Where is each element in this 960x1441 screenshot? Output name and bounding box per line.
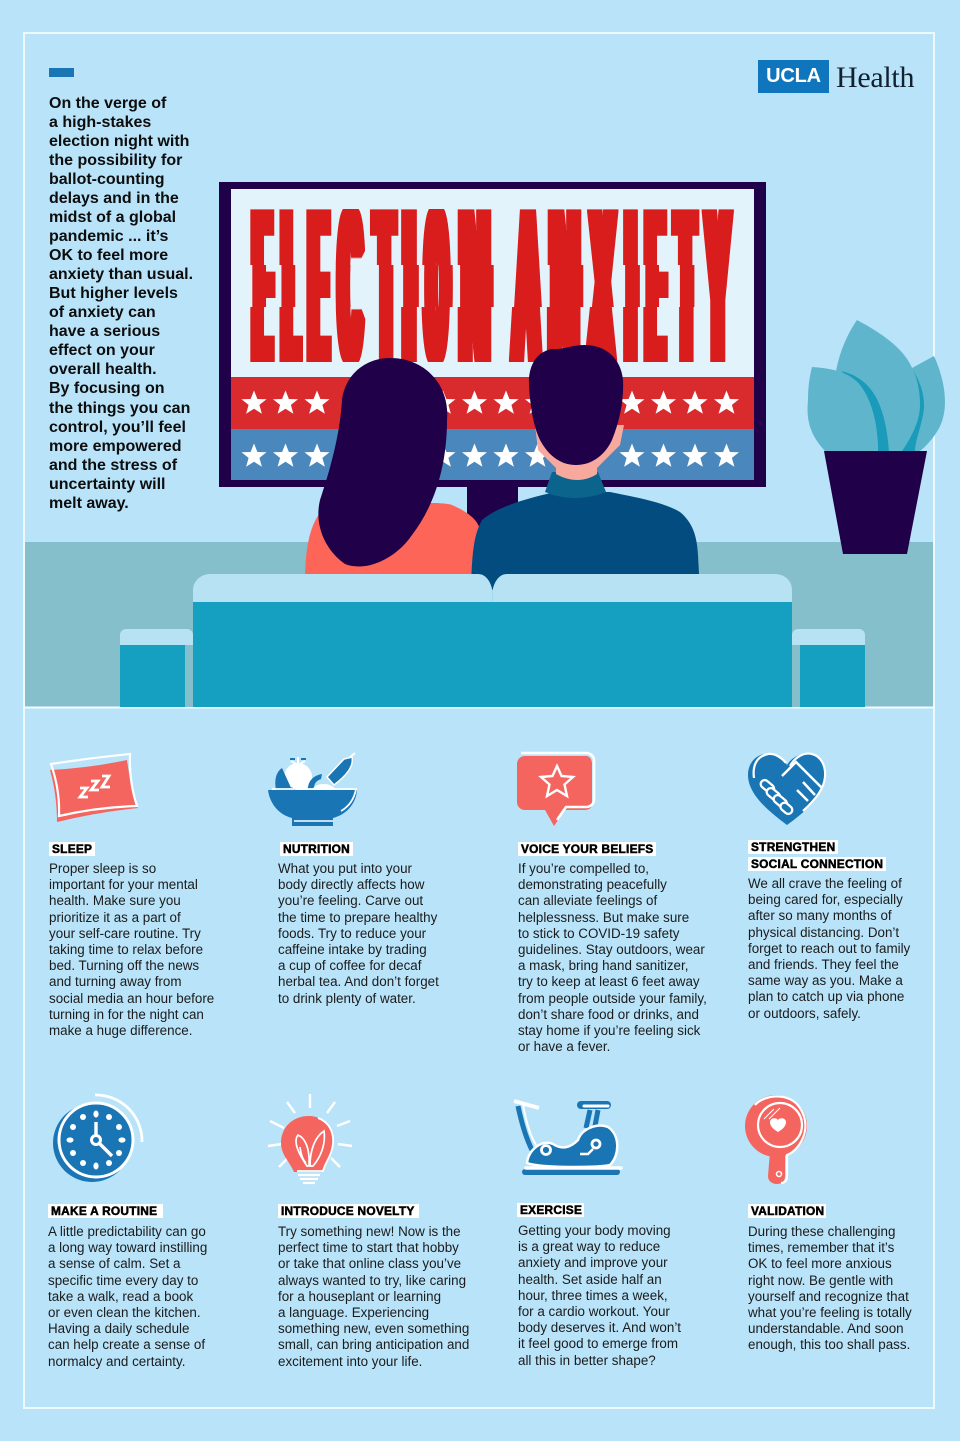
body text: or have a fever. (518, 1039, 610, 1054)
title: E (649, 164, 666, 408)
title: L (283, 164, 299, 408)
body text: to stick to COVID-19 safety (518, 926, 680, 941)
body text: you’re feeling. Carve out (278, 893, 423, 908)
body text: can help create a sense of (48, 1337, 205, 1352)
title: O (425, 164, 446, 408)
title: N (552, 164, 581, 408)
room illustration: Y (706, 164, 730, 408)
body text: turning in for the night can (49, 1007, 204, 1022)
body text: Having a daily schedule (48, 1321, 189, 1336)
body text: right now. Be gentle with (748, 1273, 893, 1288)
title: X (591, 164, 614, 408)
room illustration: Y (706, 164, 730, 408)
intro text: a high-stakes (49, 114, 151, 131)
body text (518, 1223, 681, 1368)
intro text: ballot-counting (49, 171, 165, 188)
title: C (339, 164, 362, 408)
title: E (647, 164, 664, 408)
title: I (626, 164, 635, 408)
body text: helplessness. But make sure (518, 910, 689, 925)
title: C (339, 164, 361, 408)
body text: to drink plenty of water. (278, 991, 416, 1006)
title: X (589, 164, 612, 408)
body text: important for your mental (49, 877, 198, 892)
intro text: control, you’ll feel (49, 419, 186, 436)
body text: being cared for, especially (748, 892, 903, 907)
panel: introduce novelty (268, 1094, 469, 1369)
body text: always wanted to try, like caring (278, 1273, 466, 1288)
plant (808, 320, 945, 554)
title: A (513, 164, 539, 408)
body text: We all crave the feeling of (748, 876, 902, 891)
title: T (375, 164, 394, 408)
heading: NUTRITION (283, 842, 350, 856)
body text: If you’re compelled to, (518, 861, 649, 876)
icon: pillow (50, 752, 138, 822)
body text: body deserves it. And won’t (518, 1320, 681, 1335)
body text: a mask, bring hand sanitizer, (518, 958, 688, 973)
body text: same way as you. Make a (748, 973, 903, 988)
intro text: effect on your (49, 342, 155, 359)
body text: for a houseplant or learning (278, 1289, 441, 1304)
title (250, 209, 734, 362)
body text: what you’re feeling is totally (748, 1305, 912, 1320)
body text: guidelines. Stay outdoors, wear (518, 942, 705, 957)
body text (278, 1224, 469, 1369)
television: T (678, 164, 697, 408)
body text: it feel good to emerge from (518, 1336, 678, 1351)
body text: Try something new! Now is the (278, 1224, 461, 1239)
icon: speech bubble with star (517, 752, 596, 826)
body text: demonstrating peacefully (518, 877, 667, 892)
intro text: delays and in the (49, 190, 179, 207)
intro text: midst of a global (49, 209, 176, 226)
title: N (462, 164, 491, 408)
intro text: But higher levels (49, 285, 178, 302)
panel: make a routine (48, 1094, 207, 1369)
intro text: the possibility for (49, 152, 182, 169)
intro text: and the stress of (49, 457, 177, 474)
body text (518, 861, 707, 1054)
logo: UCLA Health: UCLA (766, 65, 821, 87)
title: E (254, 164, 271, 408)
body text: a long way toward instilling (48, 1240, 207, 1255)
body text: something new, even something (278, 1321, 469, 1336)
title: N (550, 164, 579, 408)
body text (48, 1224, 207, 1369)
heading: EXERCISE (520, 1203, 582, 1217)
body text: forget to reach out to family (748, 941, 910, 956)
body text: perfect time to start that hobby (278, 1240, 459, 1255)
body text: Proper sleep is so (49, 861, 156, 876)
title: E (310, 164, 328, 408)
title: I (406, 164, 416, 408)
heading: SLEEP (52, 842, 92, 856)
intro text: By focusing on (49, 380, 165, 397)
title: C (339, 164, 361, 408)
television (219, 164, 766, 530)
body text: all this in better shape? (518, 1353, 656, 1368)
body text: is a great way to reduce (518, 1239, 660, 1254)
body text: prioritize it as a part of (49, 910, 181, 925)
title: E (254, 164, 271, 408)
body text (278, 861, 439, 1006)
intro text: pandemic ... it’s (49, 228, 168, 245)
body text: a language. Experiencing (278, 1305, 429, 1320)
title: I (628, 164, 637, 408)
body text: specific time every day to (48, 1273, 198, 1288)
logo: UCLA Health (758, 60, 914, 94)
body text: plan to catch up via phone (748, 989, 904, 1004)
panel: validation (745, 1095, 912, 1352)
title: I (626, 164, 635, 408)
television: T (677, 164, 696, 408)
heading: STRENGTHEN (751, 840, 835, 854)
intro text: anxiety than usual. (49, 266, 193, 283)
body text (748, 876, 910, 1021)
body text: small, can bring anticipation and (278, 1337, 469, 1352)
television: T (676, 164, 695, 408)
title: I (404, 164, 414, 408)
title: T (377, 164, 396, 408)
heading: MAKE A ROUTINE (51, 1204, 157, 1218)
title: T (377, 164, 396, 408)
body text: yourself and recognize that (748, 1289, 909, 1304)
icon: light bulb with leaves (268, 1094, 352, 1184)
icon: hand mirror (745, 1095, 807, 1184)
body text: can alleviate feelings of (518, 893, 657, 908)
body text: caffeine intake by trading (278, 942, 427, 957)
accent bar (49, 68, 74, 77)
icon: exercise bike (514, 1099, 623, 1175)
man (471, 345, 700, 592)
body text: stay home if you’re feeling sick (518, 1023, 700, 1038)
heading: INTRODUCE NOVELTY (281, 1204, 415, 1218)
body text: and turning away from (49, 974, 182, 989)
logo: UCLA Health: Health (836, 61, 914, 94)
title: I (404, 164, 414, 408)
body text: During these challenging (748, 1224, 895, 1239)
body text: Getting your body moving (518, 1223, 671, 1238)
heading line 2: SOCIAL CONNECTION (751, 857, 883, 871)
title: A (515, 164, 541, 408)
body text: understandable. And soon (748, 1321, 904, 1336)
body text: or outdoors, safely. (748, 1006, 861, 1021)
intro text: OK to feel more (49, 247, 168, 264)
body text: physical distancing. Don’t (748, 925, 899, 940)
title: N (549, 164, 578, 408)
heading: VALIDATION (751, 1204, 824, 1218)
body text: try to keep at least 6 feet away (518, 974, 700, 989)
intro text: overall health. (49, 361, 157, 378)
body text: a cup of coffee for decaf (278, 958, 421, 973)
panel: nutrition (268, 752, 439, 1006)
body text: after so many months of (748, 908, 892, 923)
body text: for a cardio workout. Your (518, 1304, 670, 1319)
body text (748, 1224, 912, 1352)
body text: or even clean the kitchen. (48, 1305, 201, 1320)
body text: bed. Turning off the news (49, 958, 199, 973)
intro text: more empowered (49, 438, 181, 455)
body text: health. Make sure you (49, 893, 181, 908)
sofa (120, 574, 865, 707)
body text: OK to feel more anxious (748, 1256, 892, 1271)
title: E (310, 164, 328, 408)
body text: health. Set aside half an (518, 1272, 662, 1287)
room illustration: Y (706, 164, 730, 408)
body text: from people outside your family, (518, 991, 707, 1006)
title: N (460, 164, 489, 408)
body text: What you put into your (278, 861, 412, 876)
woman (305, 358, 480, 592)
body text: taking time to relax before (49, 942, 203, 957)
intro text: election night with (49, 133, 189, 150)
body text: foods. Try to reduce your (278, 926, 426, 941)
body text: anxiety and improve your (518, 1255, 668, 1270)
body text: make a huge difference. (49, 1023, 192, 1038)
title: E (647, 164, 664, 408)
title: E (310, 164, 328, 408)
icon: handshake heart (748, 752, 826, 825)
body text: take a walk, read a book (48, 1289, 193, 1304)
body text: hour, three times a week, (518, 1288, 668, 1303)
body text: your self-care routine. Try (49, 926, 201, 941)
title: L (285, 164, 301, 408)
body text: enough, this too shall pass. (748, 1337, 910, 1352)
panel: exercise (514, 1099, 681, 1368)
intro text: uncertainty will (49, 476, 165, 493)
title: E (256, 164, 273, 408)
panel: voice your beliefs (517, 752, 707, 1054)
title: X (591, 164, 614, 408)
heading: VOICE YOUR BELIEFS (521, 842, 653, 856)
panel: sleep (49, 752, 214, 1038)
body text: or take that online class you’ve (278, 1256, 461, 1271)
title: O (428, 164, 449, 408)
body text: excitement into your life. (278, 1354, 422, 1369)
intro text (49, 95, 193, 512)
title: O (426, 164, 447, 408)
title: N (460, 164, 489, 408)
body text: herbal tea. And don’t forget (278, 974, 439, 989)
intro text: melt away. (49, 495, 129, 512)
panel: strengthen social connection (748, 752, 910, 1021)
intro text: On the verge of (49, 95, 166, 112)
intro text: the things you can (49, 400, 190, 416)
body text: don’t share food or drinks, and (518, 1007, 699, 1022)
body text: social media an hour before (49, 991, 214, 1006)
body text: the time to prepare healthy (278, 910, 437, 925)
body text: body directly affects how (278, 877, 424, 892)
body text: times, remember that it’s (748, 1240, 894, 1255)
body text: A little predictability can go (48, 1224, 206, 1239)
intro text: of anxiety can (49, 304, 156, 321)
body text: a sense of calm. Set a (48, 1256, 180, 1271)
body text (49, 861, 214, 1038)
body text: and friends. They feel the (748, 957, 899, 972)
intro text: have a serious (49, 323, 160, 340)
title: L (283, 164, 299, 408)
body text: normalcy and certainty. (48, 1354, 185, 1369)
title: A (515, 164, 541, 408)
icon: bowl (268, 752, 357, 826)
floor band (25, 542, 933, 707)
icon: clock (53, 1094, 144, 1182)
